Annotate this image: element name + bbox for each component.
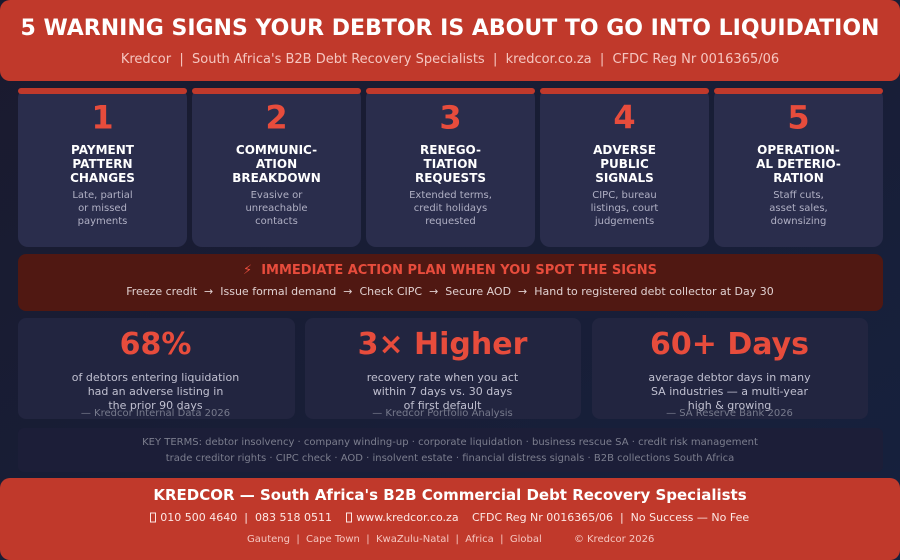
panel: sign 1: or missed <box>78 203 127 214</box>
panel: sign 4 <box>540 88 709 247</box>
stat: 60+ days: — SA Reserve Bank 2026 <box>666 408 793 419</box>
subtitle: Kredcor | South Africa's B2B Debt Recovery Specialists | kredcor.co.za | CFDC Reg Nr 0016365/06 <box>121 52 779 67</box>
panel: sign 1: payments <box>78 216 127 227</box>
stat: 3x higher: recovery rate when you act <box>367 371 519 384</box>
stat: 68%: 68% <box>120 327 191 362</box>
stat: 68%: of debtors entering liquidation <box>72 371 239 384</box>
footer: © <box>574 534 584 545</box>
stat: 60+ days: SA industries — a multi-year <box>651 385 808 398</box>
header banner <box>0 0 900 81</box>
panel: sign 2: contacts <box>255 216 298 227</box>
panel: sign 2: 2 <box>265 98 288 136</box>
panel: key terms: trade creditor rights · CIPC check · AOD · insolvent estate · financial distress signals · B2B collections South Africa <box>166 453 734 464</box>
panel: sign 1: 1 <box>91 98 114 136</box>
panel: sign 2: BREAKDOWN <box>232 171 321 185</box>
panel: immediate action plan: ⚡ IMMEDIATE ACTION PLAN WHEN YOU SPOT THE SIGNS <box>243 263 657 278</box>
panel: sign 4: judgements <box>594 216 654 227</box>
stat: 60+ days: average debtor days in many <box>648 371 811 384</box>
footer: KREDCOR — South Africa's B2B Commercial Debt Recovery Specialists <box>153 486 747 504</box>
panel: sign 3: REQUESTS <box>415 171 486 185</box>
panel: immediate action plan <box>18 254 883 311</box>
panel: key terms <box>18 428 883 472</box>
panel: sign 2: Evasive or <box>251 190 303 201</box>
stat: 60+ days: 60+ Days <box>650 327 809 362</box>
panel: sign 3 <box>366 88 535 247</box>
stat: 68%: had an adverse listing in <box>88 385 223 398</box>
footer: Kredcor 2026 <box>587 534 654 545</box>
panel: sign 4: ADVERSE <box>593 143 656 157</box>
panel: sign 2: unreachable <box>245 203 308 214</box>
panel: sign 3: RENEGO- <box>420 143 481 157</box>
panel: key terms: KEY TERMS: debtor insolvency · company winding-up · corporate liquidation · business rescue SA · credit risk management <box>142 437 758 448</box>
panel: sign 4: CIPC, bureau <box>592 190 657 201</box>
stat: 3x higher: — Kredcor Portfolio Analysis <box>372 408 513 419</box>
panel: sign 3: TIATION <box>424 157 477 171</box>
panel: sign 1: Late, partial <box>72 190 133 201</box>
panel: sign 3: Extended terms, <box>409 190 492 201</box>
panel: sign 1: CHANGES <box>70 171 135 185</box>
panel: sign 2 <box>192 88 361 247</box>
panel: sign 5: 5 <box>787 98 810 136</box>
panel: sign 1 <box>18 88 187 247</box>
panel: sign 5: OPERATION- <box>757 143 840 157</box>
footer <box>0 478 900 560</box>
panel: sign 2: ATION <box>256 157 297 171</box>
stat: 3x higher: 3× Higher <box>358 327 528 362</box>
panel: sign 5: downsizing <box>771 216 826 227</box>
panel: sign 4: listings, court <box>591 203 658 214</box>
panel: sign 5: Staff cuts, <box>773 190 824 201</box>
panel: immediate action plan: Freeze credit → Issue formal demand → Check CIPC → Secure AOD → Hand to registered debt collector at Day 30 <box>126 285 774 298</box>
footer: CFDC Reg Nr 0016365/06 | No Success — No Fee <box>472 511 749 524</box>
panel: sign 5: asset sales, <box>769 203 828 214</box>
panel: sign 4: 4 <box>613 98 636 136</box>
title: 5 WARNING SIGNS YOUR DEBTOR IS ABOUT TO GO INTO LIQUIDATION <box>21 16 879 41</box>
panel: sign 2: COMMUNIC- <box>236 143 317 157</box>
stat: 60+ days <box>592 318 868 419</box>
panel: sign 3: requested <box>425 216 476 227</box>
stat: 68% <box>18 318 295 419</box>
panel: sign 5: AL DETERIO- <box>756 157 841 171</box>
panel: sign 5 <box>714 88 883 247</box>
footer: www.kredcor.co.za <box>356 511 459 524</box>
footer: 010 500 4640 | 083 518 0511 <box>160 511 332 524</box>
panel: sign 4: PUBLIC <box>600 157 649 171</box>
panel: sign 4: SIGNALS <box>595 171 654 185</box>
stat: 60+ days: high & growing <box>688 399 771 412</box>
footer: Gauteng | Cape Town | KwaZulu-Natal | Africa | Global <box>247 534 542 545</box>
panel: sign 3: 3 <box>439 98 462 136</box>
icon: globe placeholder <box>346 513 352 522</box>
stat: 3x higher: within 7 days vs. 30 days <box>373 385 513 398</box>
stat: 3x higher: of first default <box>404 399 482 412</box>
stat: 3x higher <box>305 318 581 419</box>
panel: sign 5: RATION <box>773 171 824 185</box>
stat: 68%: — Kredcor Internal Data 2026 <box>81 408 230 419</box>
panel: sign 1: PATTERN <box>72 157 133 171</box>
stat: 68%: the prior 90 days <box>108 399 203 412</box>
icon: phone placeholder <box>150 513 156 522</box>
panel: sign 1: PAYMENT <box>71 143 135 157</box>
panel: sign 3: credit holidays <box>414 203 487 214</box>
